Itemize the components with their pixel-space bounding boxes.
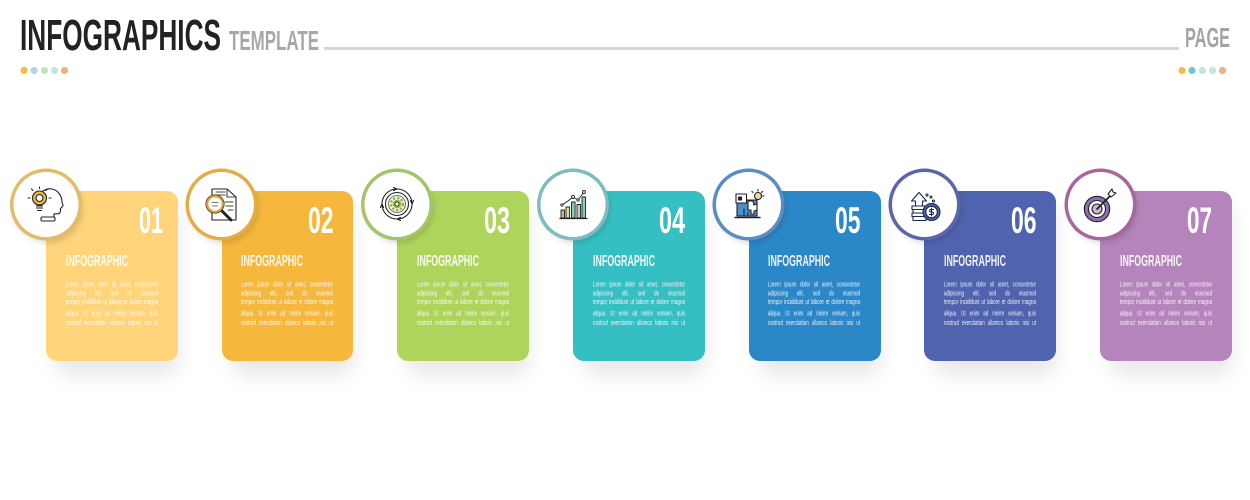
number 01: 01 bbox=[139, 200, 163, 241]
number 02: 02 bbox=[308, 200, 334, 241]
body text 02 bbox=[241, 282, 333, 327]
body text 03: tempor incididunt ut labore et dolore magna bbox=[417, 299, 509, 306]
number 04: 04 bbox=[659, 200, 685, 241]
panel: step 06 bbox=[888, 168, 1056, 375]
body text 03: nostrud exercitation ullamco laboris nisi ut bbox=[417, 320, 509, 327]
number 07: 07 bbox=[1187, 200, 1212, 241]
icon circle 04 bbox=[537, 168, 610, 243]
body text 05: Lorem ipsum dolor sit amet, consectetur bbox=[768, 282, 860, 288]
heading 04: INFOGRAPHIC bbox=[593, 253, 655, 270]
body text 05 bbox=[768, 282, 860, 327]
body text 07 bbox=[1120, 282, 1212, 327]
body text 05: aliqua. Ut enim ad minim veniam, quis bbox=[768, 310, 860, 318]
body text 06: adipiscing elit, sed do eiusmod bbox=[944, 290, 1036, 298]
body text 01 bbox=[66, 282, 158, 327]
body text 02: tempor incididunt ut labore et dolore magna bbox=[241, 299, 333, 306]
body text 06: nostrud exercitation ullamco laboris nisi ut bbox=[944, 320, 1036, 327]
number 05: 05 bbox=[835, 200, 860, 241]
icon: gear in orbit rings bbox=[380, 188, 414, 220]
icon circle 05 bbox=[712, 168, 786, 243]
body text 03: adipiscing elit, sed do eiusmod bbox=[417, 290, 509, 298]
body text 04: nostrud exercitation ullamco laboris nisi ut bbox=[593, 320, 685, 327]
body text 04 bbox=[593, 282, 685, 327]
icon circle 06 bbox=[888, 168, 962, 243]
icon circle 03 bbox=[361, 168, 434, 243]
panel: step 07 bbox=[1064, 168, 1232, 375]
body text 05: nostrud exercitation ullamco laboris nisi ut bbox=[768, 320, 860, 327]
body text 04: adipiscing elit, sed do eiusmod bbox=[593, 290, 685, 298]
body text 01: tempor incididunt ut labore et dolore magna bbox=[66, 299, 158, 306]
left dots bbox=[20, 67, 68, 74]
icon: growth bar chart bbox=[560, 190, 587, 218]
body text 01: adipiscing elit, sed do eiusmod bbox=[66, 290, 158, 298]
body text 03: aliqua. Ut enim ad minim veniam, quis bbox=[417, 310, 509, 318]
body text 05: tempor incididunt ut labore et dolore magna bbox=[768, 299, 860, 306]
icon: target with arrow bbox=[1084, 189, 1116, 222]
body text 05: adipiscing elit, sed do eiusmod bbox=[768, 290, 860, 298]
body text 06: Lorem ipsum dolor sit amet, consectetur bbox=[944, 282, 1036, 288]
icon: presentation board with lightbulb bbox=[735, 190, 764, 218]
panel: step 04 bbox=[537, 168, 705, 375]
body text 06: tempor incididunt ut labore et dolore magna bbox=[944, 299, 1036, 306]
panel: step 05 bbox=[712, 168, 881, 375]
icon: rising coins with dollar bbox=[912, 192, 940, 220]
heading 01: INFOGRAPHIC bbox=[66, 253, 128, 270]
body text 02: nostrud exercitation ullamco laboris nisi ut bbox=[241, 320, 333, 327]
body text 01: aliqua. Ut enim ad minim veniam, quis bbox=[66, 310, 158, 318]
body text 06 bbox=[944, 282, 1036, 327]
body text 02: adipiscing elit, sed do eiusmod bbox=[241, 290, 333, 298]
heading 06: INFOGRAPHIC bbox=[944, 253, 1006, 270]
right dots bbox=[1178, 67, 1226, 74]
panel: step 01 bbox=[10, 168, 178, 375]
heading 07: INFOGRAPHIC bbox=[1120, 253, 1182, 270]
heading 02: INFOGRAPHIC bbox=[241, 253, 303, 270]
body text 02: Lorem ipsum dolor sit amet, consectetur bbox=[241, 282, 333, 288]
panel: step 02 bbox=[186, 168, 353, 375]
body text 03 bbox=[417, 282, 509, 327]
body text 03: Lorem ipsum dolor sit amet, consectetur bbox=[417, 282, 509, 288]
icon circle 07 bbox=[1064, 168, 1138, 243]
heading 05: INFOGRAPHIC bbox=[768, 253, 830, 270]
header bbox=[20, 11, 1230, 74]
panel: step 03 bbox=[361, 168, 529, 375]
body text 04: tempor incididunt ut labore et dolore magna bbox=[593, 299, 685, 306]
icon: document with magnifier bbox=[206, 189, 236, 220]
icon: head with lightbulb bbox=[28, 187, 63, 221]
icon circle 01 bbox=[10, 168, 83, 243]
body text 06: aliqua. Ut enim ad minim veniam, quis bbox=[944, 310, 1036, 318]
subtitle: TEMPLATE bbox=[229, 25, 319, 56]
number 06: 06 bbox=[1011, 200, 1036, 241]
body text 01: nostrud exercitation ullamco laboris nisi ut bbox=[66, 320, 158, 327]
body text 02: aliqua. Ut enim ad minim veniam, quis bbox=[241, 310, 333, 318]
body text 04: Lorem ipsum dolor sit amet, consectetur bbox=[593, 282, 685, 288]
number 03: 03 bbox=[484, 200, 510, 241]
heading 03: INFOGRAPHIC bbox=[417, 253, 479, 270]
body text 01: Lorem ipsum dolor sit amet, consectetur bbox=[66, 282, 158, 288]
icon circle 02 bbox=[186, 168, 258, 243]
body text 04: aliqua. Ut enim ad minim veniam, quis bbox=[593, 310, 685, 318]
title: INFOGRAPHICS bbox=[20, 11, 221, 60]
